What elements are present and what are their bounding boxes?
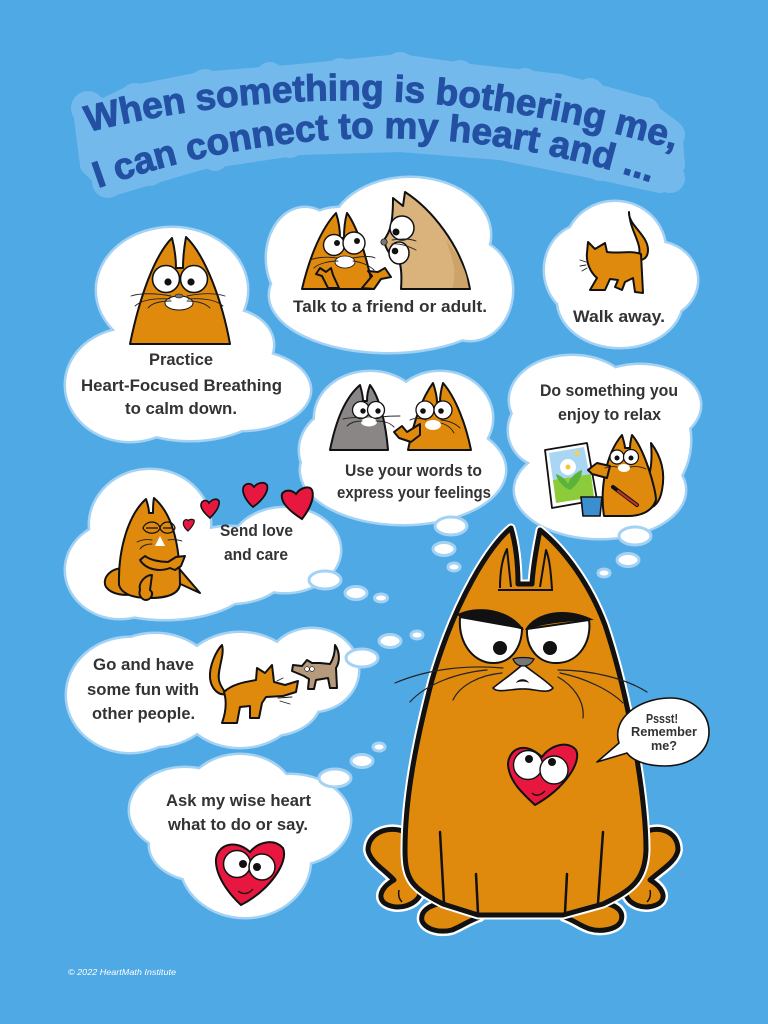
- icon: large heart: [282, 487, 313, 519]
- panel: walk away: [545, 202, 697, 347]
- thought bubbles: [309, 517, 651, 787]
- text: use your words: Use your words to: [345, 462, 482, 480]
- icon: chest heart with eyes: [508, 745, 577, 805]
- icon: small heart 2: [201, 499, 219, 518]
- text: send love: [220, 522, 293, 564]
- text: do something: enjoy to relax: [558, 406, 662, 424]
- icon: gray cat and orange cat: [330, 383, 471, 450]
- text: send love: Send love: [220, 522, 293, 540]
- text: ask my wise heart: [166, 792, 311, 834]
- title: When something is bothering me,: [82, 73, 674, 154]
- text: practice breathing: Practice: [149, 351, 213, 369]
- icon: small heart 1: [183, 519, 194, 531]
- speech bubble: Pssst!: [646, 711, 678, 726]
- text: practice breathing: Heart-Focused Breathing: [81, 377, 282, 395]
- text: do something: [540, 382, 678, 424]
- panel: do something to relax: [509, 356, 700, 538]
- back feet: [368, 829, 678, 907]
- icon: hugging cat: [105, 498, 200, 600]
- panel: send love and care: [66, 470, 340, 619]
- icon: walking cat: [580, 212, 648, 293]
- panel: talk to a friend: [267, 178, 512, 352]
- text: go and have fun: some fun with: [87, 681, 199, 699]
- panel: use your words: [300, 372, 505, 524]
- text: talk to a friend: Talk to a friend or adult.: [293, 298, 487, 316]
- text: practice breathing: to calm down.: [125, 400, 237, 418]
- text: send love: and care: [224, 546, 288, 564]
- text: ask my wise heart: what to do or say.: [167, 816, 308, 834]
- front feet: [422, 903, 622, 931]
- panel: ask my wise heart: [130, 755, 350, 917]
- icon: heart with eyes: [216, 842, 284, 905]
- icon: orange cat and tan cat: [302, 192, 470, 289]
- copyright: © 2022 HeartMath Institute: [68, 968, 177, 977]
- text: use your words: [337, 462, 491, 502]
- speech bubble: me?: [651, 738, 677, 753]
- text: use your words: express your feelings: [337, 484, 491, 502]
- text: do something: Do something you: [540, 382, 678, 400]
- speech bubble: Remember: [631, 724, 697, 739]
- main angry cat: [368, 528, 709, 931]
- icon: orange cat playing: [210, 645, 298, 723]
- text: go and have fun: other people.: [92, 705, 195, 723]
- icon: medium heart: [243, 483, 267, 507]
- text: go and have fun: Go and have: [93, 656, 194, 674]
- speech bubble: [597, 698, 709, 766]
- icon: small tan cat: [292, 645, 339, 689]
- text: ask my wise heart: Ask my wise heart: [166, 792, 311, 810]
- title: I can connect to my heart and ...: [91, 114, 651, 188]
- panel: practice breathing: [66, 228, 310, 441]
- text: go and have fun: [87, 656, 199, 723]
- icon: painting cat: [545, 435, 663, 516]
- text: walk away: Walk away.: [573, 308, 665, 326]
- icon: orange cat front: [130, 237, 230, 344]
- angry face: [395, 609, 647, 718]
- panel: go and have fun: [67, 629, 358, 752]
- title: [71, 52, 685, 198]
- text: practice breathing: [81, 351, 282, 418]
- body: [405, 528, 646, 915]
